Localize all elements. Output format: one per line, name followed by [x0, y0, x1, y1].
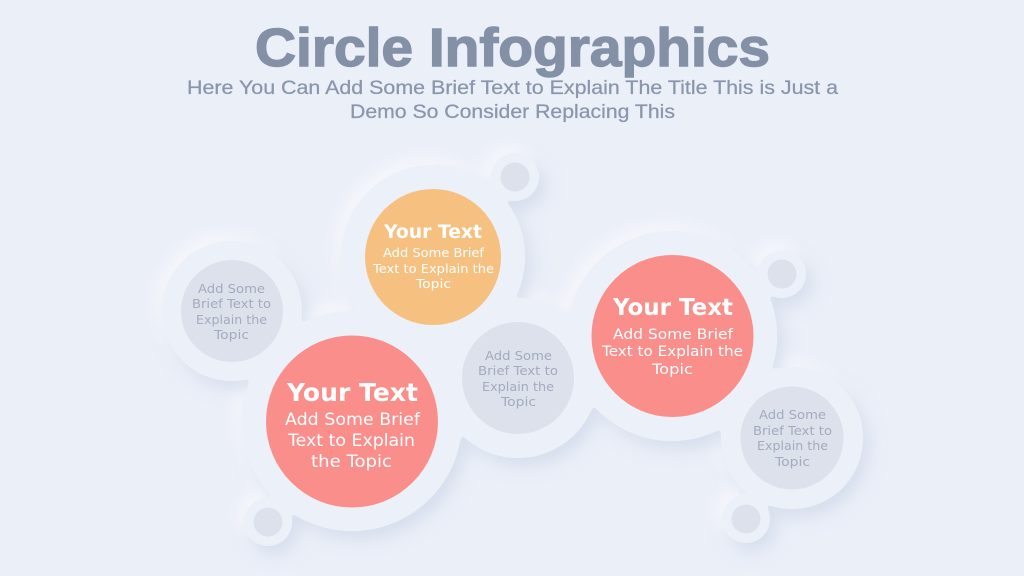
panel: orange circle: Add Some Brief	[383, 245, 485, 260]
panel: right coral circle: Text to Explain the	[601, 344, 743, 360]
panel: middle grey circle: Topic	[500, 394, 536, 409]
panel: middle grey circle: Add Some	[485, 348, 552, 363]
panel: right coral circle: Your Text	[612, 295, 733, 321]
panel: far right grey circle: Explain the	[757, 438, 828, 453]
panel: large coral circle: Add Some Brief	[285, 410, 421, 429]
panel: far left grey circle	[181, 260, 283, 362]
panel: large coral circle	[266, 336, 438, 508]
panel: orange circle: Topic	[415, 276, 451, 291]
panel: right coral circle: Add Some Brief	[613, 327, 734, 343]
title: Circle Infographics	[255, 18, 770, 78]
panel: middle grey circle: Brief Text to	[478, 363, 558, 378]
panel: orange circle	[365, 189, 501, 325]
icon: small dot bottom right	[732, 504, 760, 534]
panel: far right grey circle: Brief Text to	[753, 423, 832, 438]
panel: orange circle: Your Text	[383, 221, 482, 243]
icon: small dot top	[500, 162, 530, 192]
panel: far right grey circle	[740, 386, 844, 490]
panel: far right grey circle: Add Some	[759, 407, 826, 422]
panel: far left grey circle: Add Some	[198, 281, 265, 296]
panel: far left grey circle: Topic	[213, 327, 249, 342]
panel: far left grey circle: Explain the	[196, 312, 267, 327]
panel: large coral circle: Your Text	[286, 378, 418, 407]
icon: small dot right	[768, 260, 796, 288]
subtitle: Demo So Consider Replacing This	[350, 101, 675, 123]
subtitle: Here You Can Add Some Brief Text to Explain The Title This is Just a	[187, 77, 838, 99]
panel: right coral circle: Topic	[651, 362, 693, 378]
panel: far left grey circle: Brief Text to	[192, 296, 271, 311]
panel: middle grey circle	[462, 322, 574, 434]
icon: small dot bottom left	[254, 508, 282, 536]
raised circle cluster backing shape	[162, 153, 863, 546]
panel: large coral circle: the Topic	[311, 452, 392, 471]
panel: far right grey circle: Topic	[774, 454, 810, 469]
panel: large coral circle: Text to Explain	[287, 431, 415, 450]
panel: middle grey circle: Explain the	[482, 379, 554, 394]
panel: orange circle: Text to Explain the	[372, 261, 494, 276]
subtitle	[187, 77, 838, 123]
panel: right coral circle	[592, 255, 754, 417]
